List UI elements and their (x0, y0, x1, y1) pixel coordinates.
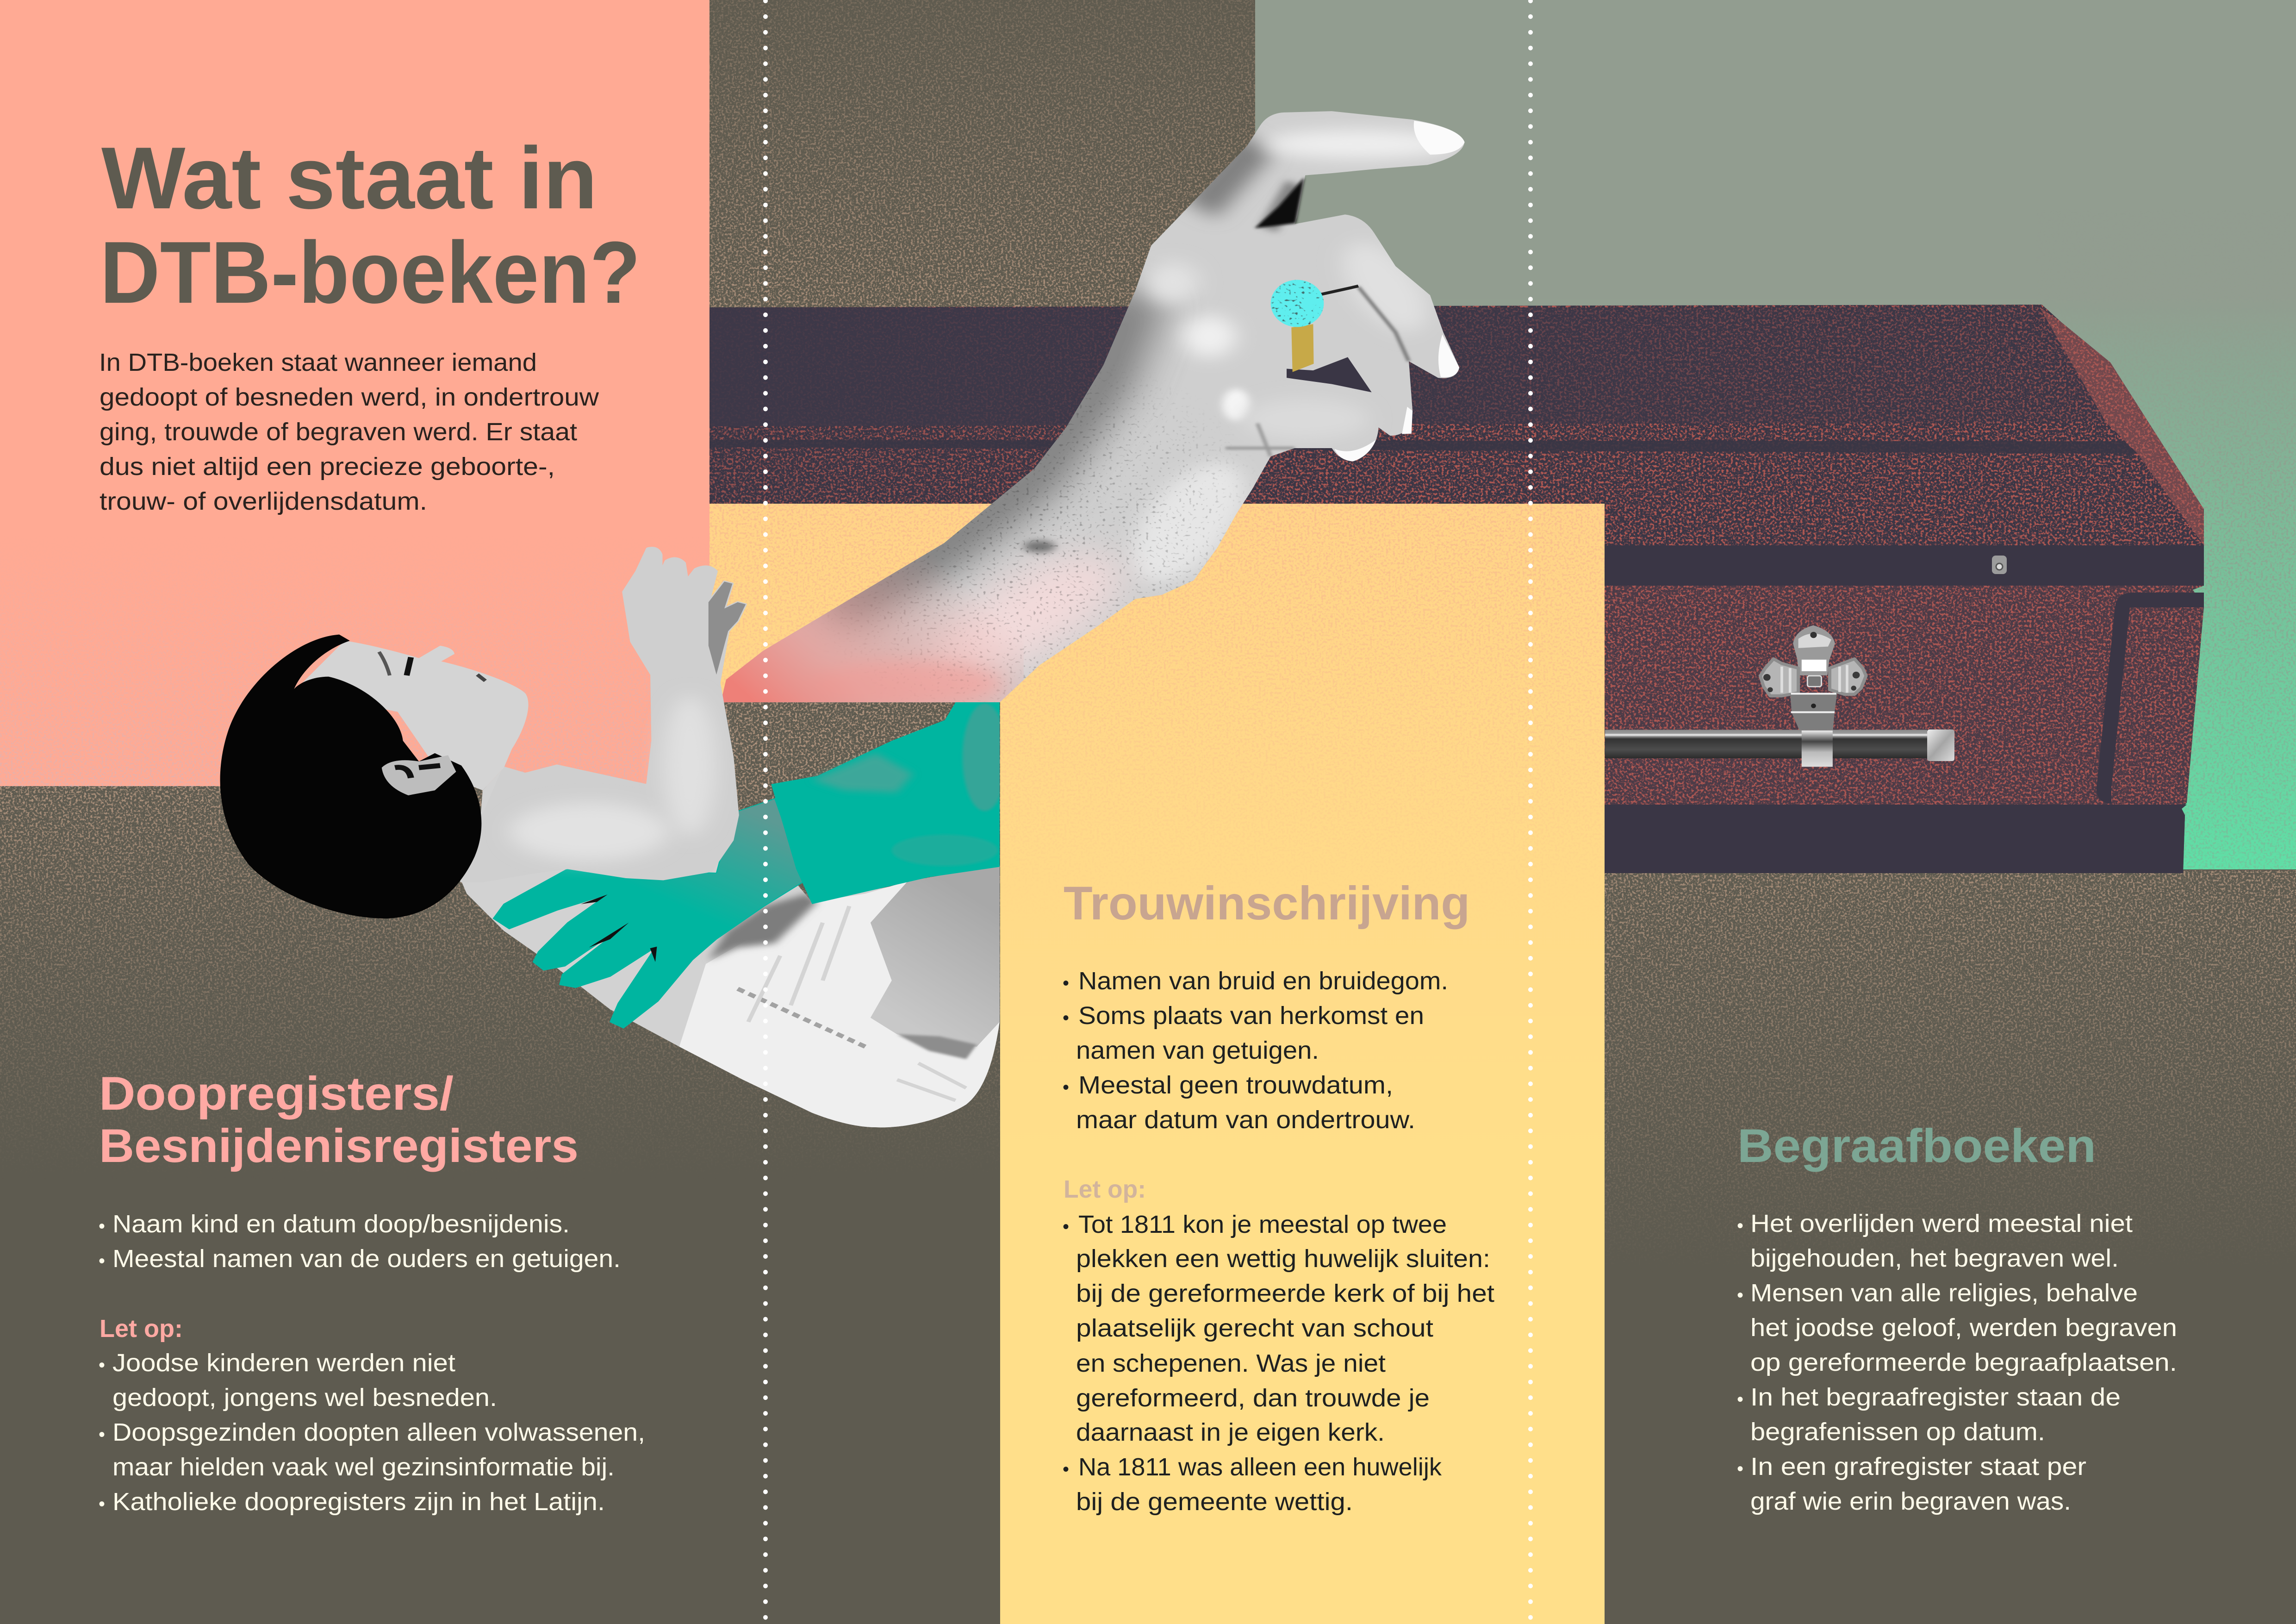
illustration: baby held by teal gloved hand (220, 548, 1007, 1127)
list: contents: namen van getuigen. (1076, 1037, 1319, 1064)
gown (679, 865, 1000, 1127)
baby body (461, 766, 1000, 1127)
list: contents (1737, 1210, 2177, 1515)
illustration: coffin (709, 301, 2209, 875)
baby ear (382, 755, 456, 795)
panel: pink title panel (0, 0, 709, 787)
list: notes: maar hielden vaak wel gezinsinformatie bij. (112, 1453, 615, 1481)
dotted line: left fold (763, 1, 768, 1624)
list: notes: bij de gereformeerde kerk of bij het (1076, 1280, 1494, 1307)
panel: yellow L-shaped panel (709, 504, 1605, 1624)
label: Let op: Let op: (100, 1315, 183, 1343)
list: notes: Na 1811 was alleen een huwelijk (1078, 1453, 1442, 1481)
coffin screw (1992, 556, 2007, 574)
list: notes: • (1063, 1459, 1069, 1480)
illustration: hand with ring (694, 111, 1465, 712)
coffin handle (1605, 626, 1954, 767)
list: contents: In het begraafregister staan de (1750, 1383, 2121, 1411)
list: notes: Tot 1811 kon je meestal op twee (1078, 1211, 1447, 1238)
list: notes: Joodse kinderen werden niet (112, 1349, 455, 1377)
list: notes: gedoopt, jongens wel besneden. (112, 1384, 497, 1412)
list: contents: In een grafregister staat per (1750, 1453, 2086, 1480)
intro text: dus niet altijd een precieze geboorte-, (100, 453, 555, 481)
baby arm, shoulder and hand (461, 548, 746, 881)
intro text (99, 349, 599, 515)
heading: Begraafboeken: Begraafboeken (1737, 1119, 2096, 1172)
list: notes: bij de gemeente wettig. (1076, 1488, 1353, 1516)
heading: Doopregisters/Besnijdenisregisters: Besnijdenisregisters (99, 1119, 579, 1172)
list: notes: • (99, 1494, 105, 1514)
list: contents: • (1737, 1216, 1743, 1236)
list: notes: • (99, 1355, 105, 1375)
intro text: In DTB-boeken staat wanneer iemand (99, 349, 537, 376)
intro text: trouw- of overlijdensdatum. (100, 487, 427, 515)
panel text: Trouwinschrijving (1063, 877, 1494, 1516)
teal gloved hand and arm (493, 702, 1007, 1028)
heading: Doopregisters/Besnijdenisregisters (99, 1067, 579, 1172)
heading: Doopregisters/Besnijdenisregisters: Doopregisters/ (99, 1067, 454, 1120)
heading: Trouwinschrijving: Trouwinschrijving (1064, 877, 1470, 930)
background: brown ground (0, 702, 1000, 1135)
list: notes: • (1063, 1217, 1069, 1237)
list: notes: plaatselijk gerecht van schout (1076, 1314, 1433, 1342)
list: notes (1063, 1211, 1494, 1516)
panel text: Doopregisters (99, 1067, 645, 1516)
baby hair (220, 635, 481, 918)
list: contents: • (1737, 1285, 1743, 1305)
title: DTB-boeken? (100, 224, 641, 322)
ring (1268, 279, 1326, 372)
list: contents: Soms plaats van herkomst en (1078, 1002, 1424, 1030)
panel text: Begraafboeken (1737, 1119, 2177, 1515)
list: contents (99, 1210, 621, 1273)
list: notes: plekken een wettig huwelijk sluiten: (1076, 1245, 1490, 1273)
list: notes (99, 1349, 645, 1516)
list: contents: Het overlijden werd meestal niet (1750, 1210, 2133, 1237)
list: contents: • (1063, 1008, 1069, 1028)
list: contents: • (1063, 973, 1069, 993)
list: contents: • (99, 1251, 105, 1271)
intro text: gedoopt of besneden werd, in ondertrouw (100, 383, 599, 411)
list: contents: • (1063, 1077, 1069, 1098)
fingernails (1334, 121, 1465, 462)
panel: top centre brown (709, 0, 1256, 308)
list: contents: • (99, 1216, 105, 1237)
list: contents: Mensen van alle religies, behalve (1750, 1279, 2138, 1307)
title: Wat staat in (101, 129, 597, 227)
list: contents: bijgehouden, het begraven wel. (1750, 1244, 2119, 1272)
list: contents: Meestal geen trouwdatum, (1078, 1071, 1393, 1099)
list: notes: • (99, 1424, 105, 1445)
list: notes: gereformeerd, dan trouwde je (1076, 1384, 1430, 1412)
list: notes: Katholieke doopregisters zijn in het Latijn. (112, 1488, 605, 1516)
list: notes: en schepenen. Was je niet (1076, 1349, 1386, 1377)
label: Let op: Let op: (1064, 1175, 1146, 1203)
list: contents: graf wie erin begraven was. (1750, 1487, 2071, 1515)
list: contents: • (1737, 1459, 1743, 1479)
list: contents (1063, 967, 1448, 1134)
list: contents: Meestal namen van de ouders en getuigen. (112, 1245, 621, 1273)
list: contents: begrafenissen op datum. (1750, 1418, 2045, 1446)
list: contents: op gereformeerde begraafplaatsen. (1750, 1349, 2177, 1376)
intro text: ging, trouwde of begraven werd. Er staat (100, 418, 577, 446)
list: contents: Naam kind en datum doop/besnijdenis. (112, 1210, 570, 1238)
list: contents: het joodse geloof, werden begraven (1750, 1314, 2177, 1342)
title (100, 129, 641, 322)
list: contents: maar datum van ondertrouw. (1076, 1106, 1415, 1134)
list: notes: Doopsgezinden doopten alleen volwassenen, (112, 1418, 645, 1446)
list: notes: daarnaast in je eigen kerk. (1076, 1418, 1385, 1446)
list: contents: • (1737, 1389, 1743, 1410)
list: contents: Namen van bruid en bruidegom. (1078, 967, 1448, 995)
panel: grey-green to mint sky (1255, 0, 2296, 875)
panel: right floor (1605, 869, 2296, 1624)
dotted line: right fold (1528, 1, 1533, 1624)
finger gap (1287, 357, 1372, 392)
baby face (294, 641, 529, 790)
